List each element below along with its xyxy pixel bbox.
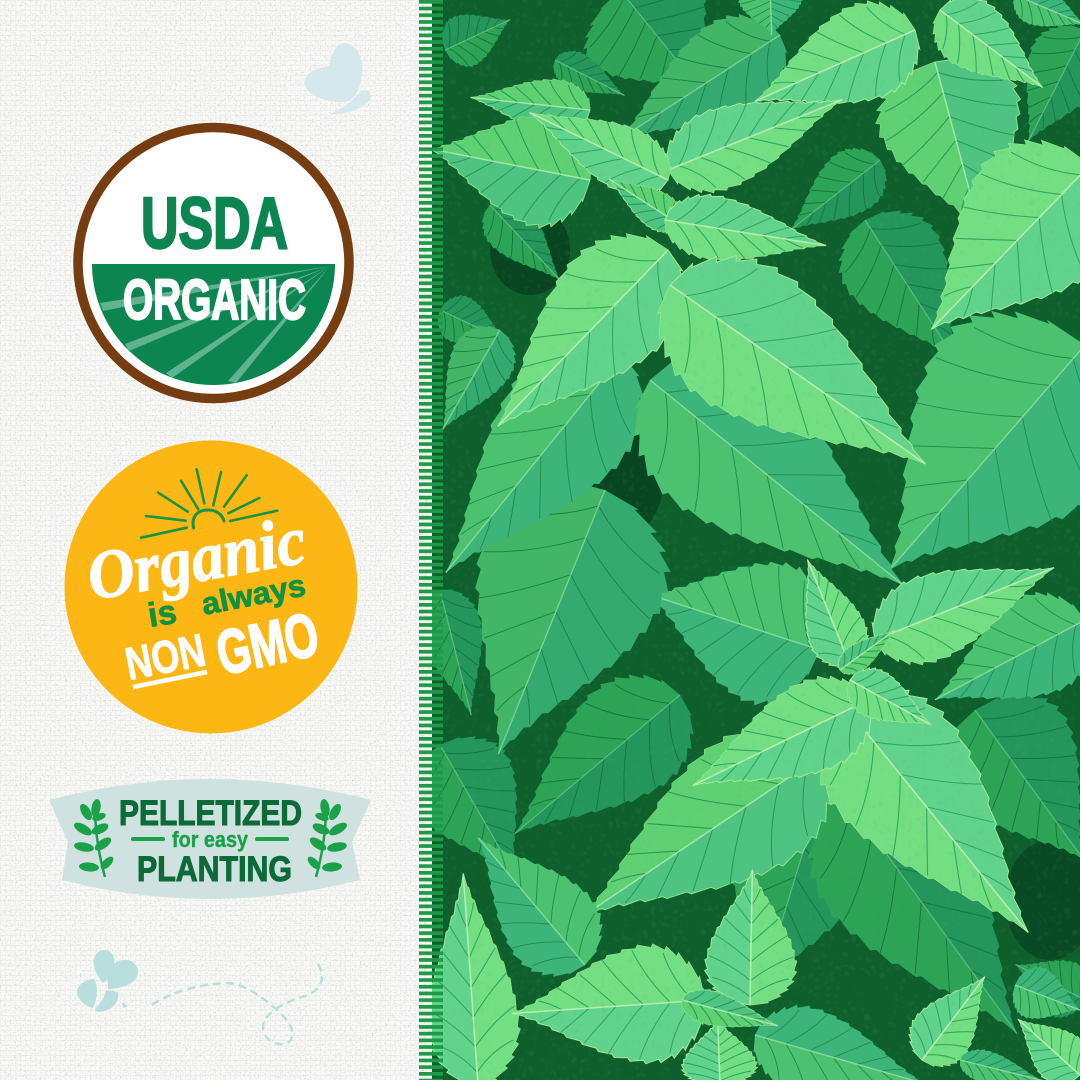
middle leaves (393, 0, 1080, 791)
linen background panel (0, 0, 432, 1080)
front lower leaf cluster (596, 558, 1054, 933)
flight path (152, 960, 322, 1044)
icon: left laurel (72, 798, 115, 877)
heading PLANTING: PLANTING (137, 850, 292, 889)
icon: right laurel (306, 798, 349, 877)
background leaves (393, 0, 1080, 1080)
icon: rising sun (141, 469, 277, 538)
bottom leaves (417, 807, 1080, 1080)
green field half circle (92, 264, 335, 385)
NON underline (133, 672, 207, 687)
word always: always (199, 567, 308, 622)
subheading for easy: for easy (172, 827, 249, 852)
bee (77, 950, 138, 1012)
green striped border (419, 0, 443, 1080)
mint leaves photo (393, 0, 1080, 1080)
banner: Pelletized for easy planting (49, 779, 371, 899)
badge: USDA Organic (78, 128, 349, 398)
script word Organic: Organic (81, 502, 311, 615)
icon: butterfly (305, 43, 371, 114)
field rays (100, 266, 330, 383)
USDA wordmark: USDA (141, 184, 288, 264)
badge: Organic is always Non GMO (64, 440, 358, 734)
dashes beside subheading (133, 837, 287, 841)
ORGANIC wordmark: ORGANIC (123, 268, 306, 332)
icon: bee with dashed flight path (77, 950, 322, 1044)
front upper leaf cluster (497, 99, 926, 464)
word NON: NON (121, 624, 209, 690)
word GMO: GMO (211, 600, 325, 689)
heading PELLETIZED: PELLETIZED (119, 794, 302, 833)
word is: is (145, 593, 179, 635)
